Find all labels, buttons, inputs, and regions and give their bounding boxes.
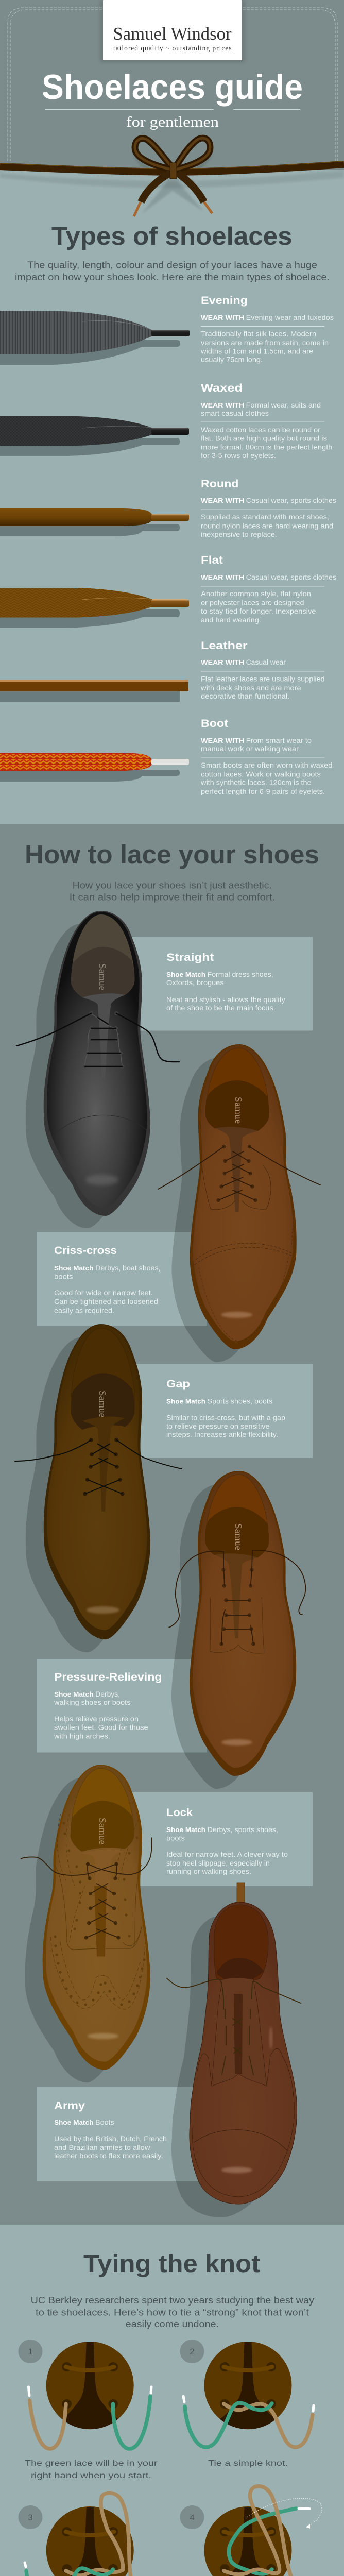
panel: army: and Brazilian armies to allow <box>54 2144 150 2151</box>
panel: pressure-relieving: with high arches. <box>54 1732 110 1740</box>
text: round: Casual wear, sports clothes <box>246 497 336 504</box>
text: flat: to stay tied for longer. Inexpensive <box>201 607 316 615</box>
text: waxed: flat. Both are high quality but round is <box>201 435 327 443</box>
text: waxed: for 3-5 rows of eyelets. <box>201 452 276 460</box>
panel: army: Boots <box>95 2119 114 2126</box>
panel: lock: Lock <box>166 1807 193 1819</box>
panel: gap: Sports shoes, boots <box>208 1397 272 1405</box>
intro text: tying the knot: to tie shoelaces. Here’s how to tie a “strong” knot that won’t <box>36 2308 309 2318</box>
text: evening: Evening wear and tuxedos <box>246 314 334 321</box>
section background: how to lace <box>0 824 344 2225</box>
title underline <box>45 109 300 110</box>
step 1: The green lace will be in your <box>25 2459 158 2468</box>
text: leather: decorative than functional. <box>201 692 289 700</box>
text: boot: manual work or walking wear <box>201 745 299 753</box>
text: evening: usually 75cm long. <box>201 355 263 364</box>
intro text: tying the knot <box>31 2295 314 2329</box>
text: flat: and hard wearing. <box>201 616 261 624</box>
shoe: tan brogue, lock lacing: Samue <box>97 1818 108 1844</box>
shoe: dark brown, gap lacing: Samue <box>97 1391 108 1417</box>
text: boot: From smart wear to <box>246 737 312 744</box>
text: evening: Traditionally flat silk laces. Modern <box>201 330 316 338</box>
text: round: round nylon laces are hard wearing and <box>201 522 333 530</box>
text: flat: Casual wear, sports clothes <box>246 573 336 581</box>
lace: boot <box>0 753 189 782</box>
intro text: types of shoelaces: impact on how your shoes look. Here are the main types of shoelace. <box>15 272 330 282</box>
shoe: tan brogue, lock lacing <box>21 1765 151 2082</box>
panel: criss-cross: Criss-cross <box>54 1245 117 1257</box>
panel: lock: running or walking shoes. <box>166 1868 251 1875</box>
panel: gap: insteps. Increases ankle flexibility. <box>166 1431 278 1438</box>
lace: evening <box>0 311 190 365</box>
text: round: Supplied as standard with most shoes, <box>201 513 329 521</box>
panel: lock <box>129 1792 313 1886</box>
heading: tying the knot: Tying the knot <box>83 2250 260 2278</box>
step 1 <box>19 2340 158 2480</box>
text: boot: Smart boots are often worn with waxed <box>201 761 333 769</box>
step 2: Tie a simple knot. <box>208 2459 288 2468</box>
shoelace bow <box>0 138 344 216</box>
text: flat: Another common style, flat nylon <box>201 590 311 598</box>
panel: gap: Gap <box>166 1378 190 1390</box>
shoe: brown cap-toe, criss-cross lacing <box>158 1044 320 1362</box>
text: leather <box>200 640 325 700</box>
text: waxed: Waxed cotton laces can be round or <box>201 426 321 434</box>
panel: gap: Similar to criss-cross, but with a gap <box>166 1414 285 1422</box>
shoe: brown plain-toe, pressure-relieving lacing <box>169 1471 305 1789</box>
intro text: how to lace: It can also help improve their fit and comfort. <box>70 892 275 903</box>
brand tagline: tailored quality ~ outstanding prices <box>113 44 232 52</box>
panel: pressure-relieving: Shoe Match <box>54 1691 94 1698</box>
panel: lock: Shoe Match <box>166 1826 205 1834</box>
text: waxed: Waxed <box>201 382 243 394</box>
text: boot: cotton laces. Work or walking boots <box>201 771 321 778</box>
shoe: dark brown, gap lacing <box>15 1324 182 1652</box>
panel: straight: Shoe Match <box>166 971 205 978</box>
text: waxed: Formal wear, suits and <box>246 401 321 409</box>
text: boot: perfect length for 6-9 pairs of eyelets. <box>201 788 325 795</box>
shoe: oxblood boot, army lacing <box>167 1883 301 2217</box>
text: waxed: more formal. 80cm is the perfect length <box>201 443 333 451</box>
intro text: types of shoelaces: The quality, length, colour and design of your laces have a huge <box>27 260 317 270</box>
text: boot: WEAR WITH <box>201 737 244 744</box>
step 1: right hand when you start. <box>31 2471 151 2480</box>
panel: pressure-relieving <box>37 1659 207 1753</box>
panel: gap: Shoe Match <box>166 1398 205 1405</box>
panel: army: Army <box>54 2100 85 2112</box>
panel: criss-cross: easily as required. <box>54 1307 114 1315</box>
panel: lock: Derbys, sports shoes, <box>208 1826 278 1834</box>
text: evening: versions are made from satin, come in <box>201 339 329 347</box>
panel: straight: of the shoe to be the main focus. <box>166 1004 276 1012</box>
text: leather: Leather <box>201 640 248 652</box>
step 2 <box>180 2340 314 2468</box>
shoe: black oxford, straight lacing: Samue <box>97 963 108 990</box>
text: round: Round <box>201 478 239 490</box>
text: boot: with synthetic laces. 120cm is the <box>200 779 312 786</box>
lace: leather <box>0 680 188 702</box>
text: round: WEAR WITH <box>201 497 244 504</box>
stitching <box>8 8 337 161</box>
panel: straight: Neat and stylish - allows the quality <box>166 996 285 1004</box>
heading: types of shoelaces: Types of shoelaces <box>51 223 293 250</box>
section background: types of shoelaces <box>0 170 344 824</box>
shoe: black oxford, straight lacing <box>16 911 179 1228</box>
text: leather: Casual wear <box>246 658 286 666</box>
text: waxed: smart casual clothes <box>201 410 269 417</box>
panel: straight <box>129 937 313 1030</box>
text: flat: WEAR WITH <box>201 573 244 581</box>
panel: army: Shoe Match <box>54 2119 94 2126</box>
panel: pressure-relieving: Derbys, <box>95 1690 120 1698</box>
panel: pressure-relieving: walking shoes or boots <box>54 1699 131 1706</box>
panel: criss-cross <box>37 1232 207 1326</box>
text: leather: Flat leather laces are usually supplied <box>201 675 325 683</box>
shoe: brown cap-toe, criss-cross lacing: Samue <box>233 1097 244 1124</box>
panel: army <box>37 2087 207 2181</box>
text: round <box>201 478 336 538</box>
lace: round <box>0 508 189 536</box>
step 3: 3 <box>28 2513 33 2522</box>
panel: straight: Formal dress shoes, <box>208 971 273 978</box>
panel: lock: boots <box>166 1834 185 1842</box>
step 3 <box>19 2493 151 2576</box>
step 4 <box>160 2486 336 2576</box>
step 2: 2 <box>190 2347 195 2357</box>
panel: gap <box>129 1364 313 1458</box>
panel: criss-cross: Shoe Match <box>54 1265 94 1272</box>
shoe: brown plain-toe, pressure-relieving lacing: Samue <box>233 1523 244 1550</box>
text: evening: WEAR WITH <box>201 314 244 321</box>
section background: header <box>0 0 344 170</box>
text: boot <box>200 718 333 795</box>
subtitle: for gentlemen <box>126 114 219 130</box>
lace: flat <box>0 588 189 628</box>
panel: pressure-relieving: Pressure-Relieving <box>54 1671 162 1683</box>
intro text: tying the knot: easily come undone. <box>126 2319 219 2329</box>
panel: lock: Ideal for narrow feet. A clever way to <box>166 1851 288 1858</box>
panel: straight: Oxfords, brogues <box>166 979 224 987</box>
text: flat <box>201 554 336 624</box>
text: waxed <box>201 382 333 460</box>
panel: criss-cross: boots <box>54 1273 73 1281</box>
text: boot: Boot <box>201 718 228 730</box>
step 1: 1 <box>28 2347 33 2357</box>
text: leather: with deck shoes and are more <box>200 684 301 692</box>
text: waxed: WEAR WITH <box>201 401 244 409</box>
text: evening: widths of 1cm and 1.5cm, and are <box>200 348 313 355</box>
panel: gap: to relieve pressure on sensitive <box>166 1422 270 1430</box>
panel: army: leather boots to flex more easily. <box>54 2152 163 2160</box>
intro text: how to lace <box>70 880 275 903</box>
section background: tying the knot <box>0 2225 344 2576</box>
intro text: types of shoelaces <box>15 260 330 282</box>
panel: straight: Straight <box>166 952 214 963</box>
heading: how to lace your shoes: How to lace your shoes <box>25 840 319 869</box>
text: flat: Flat <box>201 554 223 566</box>
lace: waxed <box>0 416 189 456</box>
panel: criss-cross: Good for wide or narrow feet. <box>54 1289 153 1297</box>
panel: criss-cross: Can be tightened and loosened <box>54 1298 158 1306</box>
logo tab <box>100 0 245 62</box>
panel: criss-cross: Derbys, boat shoes, <box>95 1264 161 1272</box>
panel: lock: stop heel slippage, especially in <box>166 1859 270 1867</box>
text: flat: or polyester laces are designed <box>201 599 304 607</box>
step 4: 4 <box>190 2513 195 2522</box>
panel: pressure-relieving: Helps relieve pressure on <box>54 1715 139 1723</box>
intro text: how to lace: How you lace your shoes isn’t just aesthetic. <box>73 880 272 890</box>
intro text: tying the knot: UC Berkley researchers spent two years studying the best way <box>31 2295 314 2306</box>
panel: pressure-relieving: swollen feet. Good for those <box>54 1724 148 1732</box>
panel: army: Used by the British, Dutch, French <box>54 2135 167 2143</box>
title: Shoelaces guide <box>42 67 303 107</box>
text: leather: WEAR WITH <box>201 658 244 666</box>
text: evening <box>200 295 334 364</box>
text: evening: Evening <box>201 295 248 307</box>
text: round: inexpensive to replace. <box>201 531 277 538</box>
brand name: Samuel Windsor <box>113 24 232 44</box>
